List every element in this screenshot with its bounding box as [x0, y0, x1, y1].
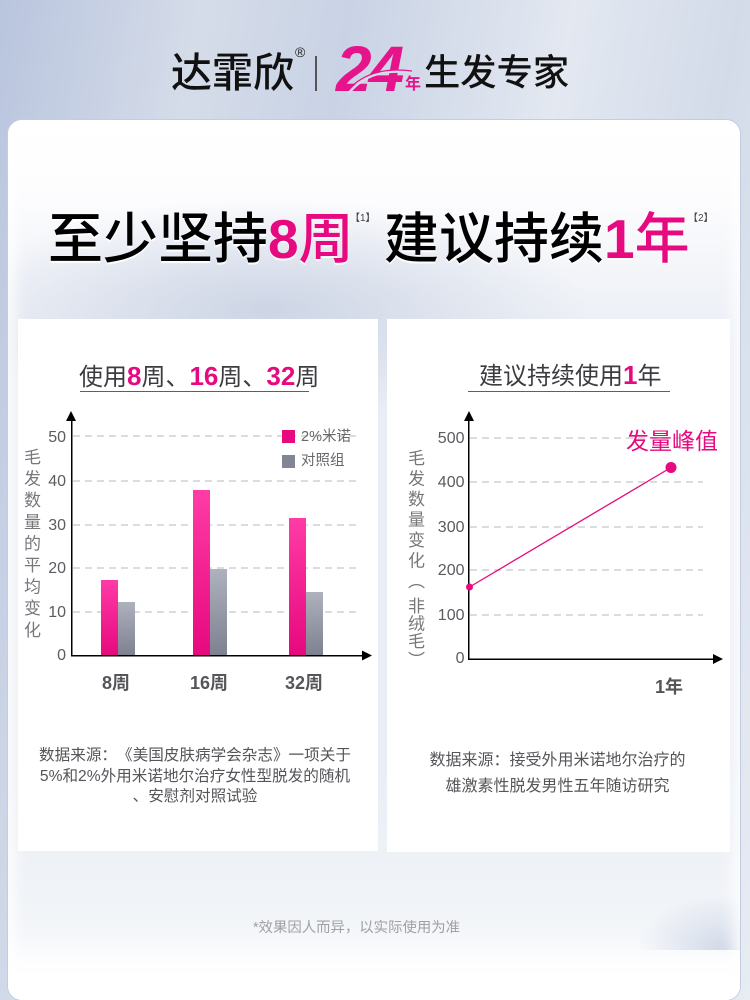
y tick labels: 0 — [456, 650, 464, 667]
data source — [39, 746, 351, 805]
axes — [464, 411, 723, 664]
data source: 数据来源：接受外用米诺地尔治疗的 — [429, 752, 686, 769]
header divider — [315, 56, 316, 91]
x labels: 8周 — [102, 673, 130, 693]
footnote: *效果因人而异，以实际使用为准 — [253, 920, 460, 936]
brand header — [171, 33, 569, 105]
headline right: 建议持续1年 — [384, 208, 690, 270]
headline left: 至少坚持8周 — [48, 208, 354, 270]
y tick labels: 400 — [438, 474, 464, 491]
bars: 8 weeks — [101, 580, 135, 655]
data source: 、安慰剂对照试验 — [133, 788, 257, 805]
x labels: 16周 — [190, 673, 228, 693]
panel: line chart — [387, 319, 730, 852]
x labels — [102, 673, 323, 693]
y axis label: 毛发数量的平均变化 — [21, 448, 40, 642]
bars: 32 weeks — [289, 518, 323, 655]
year character: 年 — [405, 76, 421, 93]
data source: 雄激素性脱发男性五年随访研究 — [445, 778, 670, 794]
footnote mark 1: 【1】 — [350, 213, 376, 224]
slogan: 生发专家 — [424, 52, 569, 93]
y tick labels — [438, 430, 464, 667]
y tick labels: 500 — [438, 430, 464, 447]
registered mark: ® — [295, 44, 305, 60]
y tick labels: 0 — [57, 647, 66, 664]
main headline — [48, 208, 714, 270]
line chart — [464, 411, 723, 664]
data source: 5%和2%外用米诺地尔治疗女性型脱发的随机 — [40, 768, 350, 784]
y axis label: 毛发数量变化 （ 非绒 毛 ） — [405, 449, 424, 668]
legend labels: 2%米诺 — [301, 429, 351, 445]
y tick labels: 30 — [48, 517, 66, 534]
year swoosh — [348, 69, 412, 94]
legend labels: 对照组 — [301, 453, 344, 469]
bars: 16 weeks — [193, 490, 227, 655]
data source — [429, 751, 686, 794]
heading underline — [80, 391, 309, 392]
trend line — [466, 462, 676, 590]
y tick labels — [48, 429, 66, 664]
y tick labels: 10 — [48, 604, 66, 621]
24 year mark: 24 — [336, 33, 401, 105]
x label: 1年 — [655, 677, 683, 697]
panel heading: 使用8周、16周、32周 — [79, 361, 319, 391]
legend swatches — [282, 430, 295, 468]
axes — [66, 411, 372, 660]
peak callout: 发量峰值 — [626, 428, 718, 454]
y tick labels: 20 — [48, 560, 66, 577]
data source: 数据来源：《美国皮肤病学会杂志》一项关于 — [39, 747, 351, 764]
lower right shade — [640, 890, 740, 950]
x labels: 32周 — [285, 673, 323, 693]
y tick labels: 100 — [438, 607, 464, 624]
heading underline — [468, 391, 670, 392]
bar chart — [66, 411, 372, 660]
y tick labels: 40 — [48, 473, 66, 490]
panel heading: 建议持续使用1年 — [479, 360, 661, 390]
y tick labels: 200 — [438, 562, 464, 579]
y tick labels: 300 — [438, 519, 464, 536]
legend labels — [301, 428, 351, 469]
brand name: 达霏欣 — [171, 50, 294, 96]
footnote mark 2: 【2】 — [688, 213, 714, 224]
panel: bar chart — [18, 319, 378, 851]
y tick labels: 50 — [48, 429, 66, 446]
